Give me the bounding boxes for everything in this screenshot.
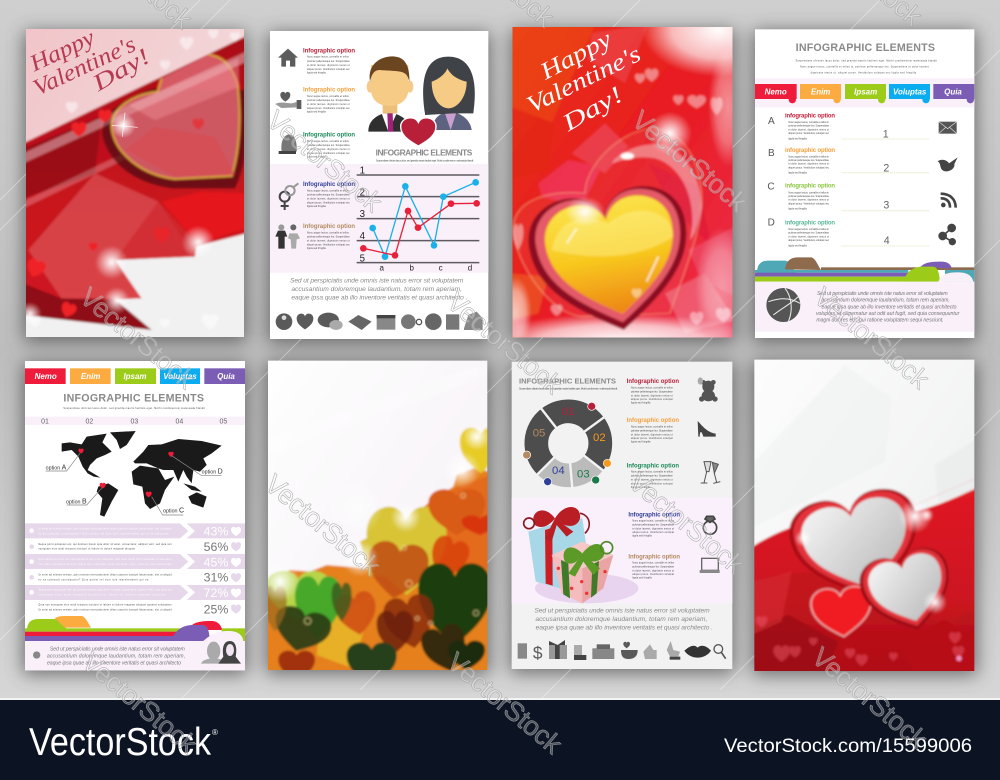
watermarks: VectorStock: [626, 105, 753, 218]
option list: Infographic option: [303, 133, 355, 139]
tabs: [25, 368, 245, 384]
option rows: B: [768, 148, 775, 159]
bullet: [33, 651, 40, 659]
option list: ligula sed fringilla: [307, 205, 326, 208]
title: Happy Valentine's Day: Day!: [557, 82, 628, 138]
icon: hand with heart: [275, 92, 301, 109]
option list: Nunc augue lectus, convallis et tellus: [307, 231, 349, 234]
paragraph: [47, 647, 186, 667]
option list: et dolor laoreet, dignissim metus ut: [631, 433, 673, 436]
icon: high heel: [698, 421, 716, 437]
percentage rows: Ut enim ad minima veniam, quis nostrum exercitationem ullam corporis suscipit laboriosam, nisi ut aliquid: [38, 528, 172, 531]
percentage rows: ex ea commodi consequatur? Quis autem vel eum iure reprehenderit qui ea: [38, 578, 149, 581]
world map: option A: [46, 464, 67, 471]
tabs: Enim: [811, 87, 830, 96]
option rows: infographic option: [785, 183, 835, 189]
option list: ligula sed fringilla: [307, 156, 326, 159]
paragraph: accusantium doloremque laudantium, totam rem aperiam,: [47, 653, 185, 659]
panel: golden heart greeting card: [512, 27, 732, 338]
option list: Nunc augue lectus, convallis et tellus: [631, 471, 673, 474]
option rows: pulvinar pellentesque leo. Suspendisse: [788, 159, 830, 162]
option rows: aliquet purus. Vestibulum volutpat nec: [788, 239, 830, 242]
option rows: Nunc augue lectus, convallis et tellus in: [788, 191, 830, 194]
option list: Nunc augue lectus, convallis et tellus: [632, 519, 675, 522]
watermarks: VectorStock: [259, 469, 386, 582]
subtitle: dignissim metus ut, aliquet purus. Vestibulum volutpat nec ligula sed fringilla: [811, 71, 917, 74]
tabs: [755, 84, 974, 103]
percentage rows: 43%: [204, 524, 228, 538]
registered mark: ®: [212, 728, 218, 737]
watermarks: VectorStock: [623, 467, 750, 580]
option rows: D: [768, 217, 775, 228]
tabs: Quia: [217, 372, 235, 381]
title: Happy Valentine's Day: Valentine's: [29, 31, 140, 101]
percentage rows: numquam eius modi tempora incidunt ut labore et dolore magnam aliquam: [38, 548, 135, 551]
option list: et dolor laoreet, dignissim metus ut: [631, 479, 673, 482]
option list: ligula sed fringilla: [632, 535, 652, 538]
watermarks: VectorStock: [441, 647, 568, 760]
option list: aliquet purus. Vestibulum volutpat: [631, 398, 673, 401]
percentage rows: Neque porro quisquam est, qui dolorem ipsum quia dolor sit amet, consectetur, adipisci velit, sed quia non: [38, 589, 172, 592]
option rows: Nunc augue lectus, convallis et tellus in: [788, 155, 830, 158]
sparkle flare: [111, 113, 138, 138]
percentage rows: 56%: [204, 540, 228, 554]
option list: aliquet purus. Vestibulum volutpat: [631, 437, 673, 440]
paragraph: eaque ipsa quae ab illo inventore veritatis et quasi architecto: [821, 304, 957, 310]
option rows: aliquet purus. Vestibulum volutpat nec: [788, 202, 830, 205]
option rows: et dolor laoreet, dignissim metus ut: [788, 199, 829, 202]
watermarks: VectorStock: [806, 642, 933, 755]
option rows: pulvinar pellentesque leo. Suspendisse: [788, 125, 830, 128]
subtitle: Suspendisse ultricies lacus dolor, sed gravida mauris facilisis eget. Morbi condimentum malesuada blandit: [63, 407, 205, 410]
percentage rows: 25%: [204, 603, 228, 617]
panel: donut chart and gifts: [512, 362, 732, 669]
subtitle: Suspendisse ultricies lacus dolor, sed gravida mauris facilisis eget. Morbi condimentum malesuada blandit: [519, 387, 618, 390]
option list: Nunc augue lectus, convallis et tellus: [631, 386, 673, 389]
tabs: Voluptas: [893, 87, 927, 96]
icon row: [518, 640, 726, 663]
option rows: et dolor laoreet, dignissim metus ut: [788, 163, 829, 166]
heading: INFOGRAPHIC ELEMENTS: [63, 393, 204, 405]
option list: pulvinar pellentesque leo. Suspendisse: [307, 144, 350, 147]
tabs: Enim: [81, 372, 100, 381]
percentage rows: Neque porro quisquam est, qui dolorem ipsum quia dolor sit amet, consectetur, adipisci velit, sed quia non: [38, 543, 172, 546]
option list: aliquet purus. Vestibulum volutpat: [631, 482, 673, 485]
option list: Infographic option: [303, 224, 355, 230]
option rows: 3: [883, 199, 889, 211]
world map: option D: [202, 469, 223, 476]
option rows: ligula sed fringilla: [788, 137, 807, 140]
option list: pulvinar pellentesque leo. Suspendisse: [631, 475, 673, 478]
option list: pulvinar pellentesque leo. Suspendisse: [307, 60, 350, 63]
option list: aliquet purus. Vestibulum volutpat: [632, 531, 674, 534]
percentage rows: Quis autem vel eum iure reprehenderit qui in ea voluptate velit esse quam nihil molestiae consequatur: [38, 558, 172, 561]
option list: aliquet purus. Vestibulum volutpat nec: [307, 68, 350, 71]
percentage rows: Ut enim ad minima veniam, quis nostrum exercitationem ullam corporis suscipit laboriosam, nisi ut aliquid: [38, 574, 172, 577]
footer ribbons: [25, 616, 245, 642]
icon: couple figures: [275, 224, 300, 249]
tabs: Quia: [944, 87, 962, 96]
subtitle: Suspendisse ultricies lacus dolor, sed gravida mauris facilisis eget. Morbi condimentum malesuada blandit: [796, 60, 937, 63]
option rows: infographic option: [785, 114, 835, 120]
heading: infographic elements: INFOGRAPHIC ELEMENTS: [376, 147, 473, 157]
image id: VectorStock.com/15599006: [724, 736, 972, 757]
option rows: C: [767, 182, 775, 193]
option list: et dolor laoreet, dignissim metus ut: [632, 527, 674, 530]
number band: 04: [175, 418, 183, 425]
red bow: [533, 507, 580, 542]
number band: 02: [85, 418, 93, 425]
line chart: [357, 165, 480, 273]
icon: mail: [939, 122, 957, 134]
percentage rows: 72%: [204, 586, 228, 600]
subtitle: [796, 60, 937, 74]
line chart: d: [468, 264, 472, 273]
line chart: 4: [360, 231, 366, 242]
paragraph: Sed ut perspiciatis unde omnis iste natus error sit voluptatem: [50, 647, 186, 653]
option list: Infographic option: [627, 418, 679, 424]
option list: Infographic option: [627, 379, 679, 385]
option list: aliquet purus. Vestibulum volutpat nec: [307, 107, 350, 110]
option list: Infographic option: [628, 555, 680, 561]
option list: ligula sed fringilla: [307, 111, 326, 114]
percentage rows: Quia non numquam eius modi tempora incidunt ut labore et dolore magnam aliquam quaerat voluptatem: [38, 604, 172, 607]
option rows: Nunc augue lectus, convallis et tellus in: [788, 228, 830, 231]
panel: valentine card with glass heart: [18, 24, 247, 340]
option list: Infographic option: [303, 48, 355, 54]
paragraph: Sed ut perspiciatis unde omnis iste natus error sit voluptatem: [817, 291, 948, 297]
line chart: a: [379, 264, 384, 273]
donut chart: [523, 398, 613, 488]
world map: option B: [66, 498, 87, 505]
option list: pulvinar pellentesque leo. Suspendisse: [307, 193, 350, 196]
watermarks: VectorStock: [76, 647, 203, 760]
tabs: Nemo: [765, 87, 787, 96]
heading: INFOGRAPHIC ELEMENTS: [796, 42, 935, 54]
option list: Nunc augue lectus, convallis et tellus: [307, 95, 349, 98]
heading: INFOGRAPHIC ELEMENTS: [519, 376, 616, 385]
option list: Infographic option: [303, 182, 355, 188]
option list: et dolor laoreet, dignissim metus ut: [307, 239, 350, 242]
tabs: Nemo: [35, 372, 57, 381]
option list: aliquet purus. Vestibulum volutpat nec: [307, 243, 350, 246]
percentage rows: ex ea commodi consequatur? Quis autem vel eum iure reprehenderit qui in ea voluptate: [38, 533, 169, 536]
icon: teddy bear: [698, 377, 718, 402]
option list: et dolor laoreet, dignissim metus ut: [307, 197, 350, 200]
tabs: Voluptas: [163, 372, 197, 381]
icon row: $: [533, 643, 543, 663]
option list: Nunc augue lectus, convallis et tellus: [307, 56, 349, 59]
line chart: c: [439, 264, 443, 273]
icon: globe: [766, 288, 800, 322]
option rows: Nunc augue lectus, convallis et tellus in: [788, 121, 830, 124]
illustration: red heart: [401, 118, 436, 146]
option list: Infographic option: [628, 513, 680, 519]
option list: aliquet purus. Vestibulum volutpat nec: [307, 152, 350, 155]
paragraph: eaque ipsa quae ab illo inventore veritatis et quasi architecto: [47, 661, 181, 667]
option rows: 4: [884, 235, 890, 247]
title: Happy Valentine's Day: [25, 24, 155, 101]
option list: et dolor laoreet, dignissim metus ut: [307, 148, 350, 151]
option rows: aliquet purus. Vestibulum volutpat nec: [788, 132, 830, 135]
option list: aliquet purus. Vestibulum volutpat: [632, 573, 674, 576]
number band: 03: [130, 418, 138, 425]
number band: [25, 417, 245, 425]
icon: champagne glasses: [701, 462, 720, 483]
option list: pulvinar pellentesque leo. Suspendisse: [632, 565, 675, 568]
option rows: ligula sed fringilla: [788, 207, 807, 210]
option rows: et dolor laoreet, dignissim metus ut: [788, 235, 829, 238]
title: Happy Valentine's Day: Happy: [535, 26, 617, 86]
option rows: et dolor laoreet, dignissim metus ut: [788, 128, 829, 131]
line chart: 5: [360, 253, 365, 264]
watermarks: VectorStock: [261, 105, 388, 218]
icon: ring: [703, 516, 717, 534]
paragraph: eaque ipsa quae ab illo inventore veritatis et quasi architecto .: [536, 624, 713, 631]
percentage rows: 45%: [204, 555, 228, 569]
option list: ligula sed fringilla: [632, 577, 652, 580]
option list: Nunc augue lectus, convallis et tellus: [631, 425, 673, 428]
option rows: 2: [883, 163, 889, 175]
percentage rows: Ut enim ad minima veniam, quis nostrum exercitationem ullam corporis suscipit laboriosam, nisi ut aliquid: [38, 608, 172, 611]
watermarks: VectorStock: [441, 287, 568, 400]
option rows: infographic option: [785, 220, 835, 226]
option list: ligula sed fringilla: [631, 441, 651, 444]
icon row: [276, 312, 483, 330]
number band: 01: [41, 418, 49, 425]
option rows: ligula sed fringilla: [788, 171, 807, 174]
paragraph: accusantium doloremque laudantium, totam rem aperiam,: [821, 298, 950, 304]
watermarks: VectorStock: [74, 282, 201, 395]
paragraph: Sed ut perspiciatis unde omnis iste natus error sit voluptatem: [534, 608, 710, 615]
donut chart: 04: [552, 465, 565, 477]
option list: et dolor laoreet, dignissim metus ut: [307, 103, 350, 106]
title: Happy Valentine's Day: Valentine's: [523, 41, 645, 119]
option rows: aliquet purus. Vestibulum volutpat nec: [788, 166, 830, 169]
donut chart: 03: [577, 468, 590, 480]
paragraph: magni dolores eos qui ratione voluptatem sequi nesciunt.: [816, 318, 944, 324]
paragraph: accusantium doloremque laudantium, totam rem aperiam,: [535, 616, 707, 623]
paragraph: [290, 278, 467, 301]
option list: ligula sed fringilla: [631, 486, 651, 489]
option rows: ligula sed fringilla: [788, 244, 807, 247]
illustration: man: [367, 56, 413, 132]
option list: aliquet purus. Vestibulum volutpat nec: [307, 201, 350, 204]
donut chart: 02: [593, 432, 606, 444]
paragraph: [534, 608, 713, 631]
option rows: infographic option: [785, 148, 835, 154]
panel: silver twin hearts card: [751, 356, 978, 674]
footer bar: [0, 698, 1000, 780]
panel: autumn hearts background: [268, 360, 488, 670]
paragraph: Sed ut perspiciatis unde omnis iste natus error sit voluptatem: [290, 278, 464, 285]
world map: [46, 431, 223, 517]
icon: two people: [201, 641, 241, 664]
option list: Infographic option: [627, 463, 679, 469]
footer ribbons: [755, 257, 974, 282]
option list: pulvinar pellentesque leo. Suspendisse: [631, 429, 673, 432]
icon: rss: [941, 194, 956, 208]
option rows: A: [768, 116, 775, 127]
subtitle: Nunc augue lectus, convallis et tellus in, pulvinar pellentesque leo. Suspendisse et dolor laoreet: [800, 66, 929, 69]
option list: pulvinar pellentesque leo. Suspendisse: [631, 390, 673, 393]
icon: bird: [938, 157, 958, 171]
option rows: pulvinar pellentesque leo. Suspendisse: [788, 195, 830, 198]
panel: tabs with lettered options: [755, 29, 974, 338]
option list: et dolor laoreet, dignissim metus ut: [307, 64, 350, 67]
paragraph: accusantium doloremque laudantium, totam rem aperiam,: [291, 286, 462, 293]
icon: bell: [279, 134, 297, 154]
option list: ligula sed fringilla: [307, 247, 326, 250]
paragraph: [816, 291, 960, 324]
option list: Nunc augue lectus, convallis et tellus: [307, 189, 349, 192]
option list: [627, 379, 680, 580]
donut chart: 01: [562, 406, 575, 418]
percentage rows: numquam eius modi tempora incidunt ut labore et dolore magnam aliquam: [38, 594, 165, 597]
line chart: 3: [360, 209, 365, 220]
panel: world map with percentages: [25, 361, 245, 670]
world map: option C: [163, 508, 184, 515]
panel: couple and line chart infographic: [270, 31, 488, 339]
illustration: gift boxes: [524, 507, 638, 603]
option list: pulvinar pellentesque leo. Suspendisse: [307, 235, 350, 238]
tabs: Ipsam: [123, 372, 147, 381]
option list: [303, 48, 355, 250]
option list: pulvinar pellentesque leo. Suspendisse: [632, 523, 675, 526]
option list: ligula sed fringilla: [631, 402, 651, 405]
paragraph: voluptas sit aspernatur aut odit aut fugit, sed quia consequuntur: [816, 311, 960, 317]
option list: pulvinar pellentesque leo. Suspendisse: [307, 99, 350, 102]
option list: et dolor laoreet, dignissim metus ut: [632, 569, 674, 572]
number band: 05: [219, 418, 227, 425]
line chart: b: [409, 264, 414, 273]
paragraph: eaque ipsa quae ab illo inventore veritatis et quasi architecto .: [291, 294, 467, 301]
title: Happy Valentine's Day: Day!: [87, 44, 155, 98]
logo: VectorStock: [29, 721, 211, 764]
donut chart: 05: [533, 427, 545, 439]
option rows: 1: [883, 128, 889, 140]
option list: Nunc augue lectus, convallis et tellus: [632, 561, 675, 564]
option list: et dolor laoreet, dignissim metus ut: [631, 394, 673, 397]
icon: house: [278, 49, 298, 67]
title: Happy Valentine's Day: Happy: [25, 24, 99, 78]
line chart: 2: [360, 187, 365, 198]
icon: laptop: [700, 558, 720, 573]
title: Happy Valentine's Day: [523, 26, 645, 138]
option rows: [767, 114, 929, 247]
percentage rows: [25, 523, 245, 617]
percentage rows: 31%: [204, 571, 228, 585]
option list: Nunc augue lectus, convallis et tellus: [307, 140, 349, 143]
option list: ligula sed fringilla: [307, 72, 326, 75]
icon: gender symbols: [280, 183, 298, 210]
icon: share: [938, 224, 956, 245]
line chart: 1: [360, 165, 365, 176]
watermarks: VectorStock: [808, 282, 935, 395]
tabs: Ipsam: [854, 87, 877, 96]
percentage rows: vel illum qui dolorem eum fugiat quo voluptas nulla pariatur, quis nostrum exercitationem: [38, 563, 172, 566]
option list: Infographic option: [303, 88, 355, 94]
subtitle: Suspendisse ultricies lacus dolor, sed gravida mauris facilisis eget. Morbi condimentum malesuada blandit: [376, 159, 474, 162]
green bow: [564, 544, 604, 577]
option rows: pulvinar pellentesque leo. Suspendisse: [788, 232, 830, 235]
illustration: woman: [423, 57, 475, 130]
